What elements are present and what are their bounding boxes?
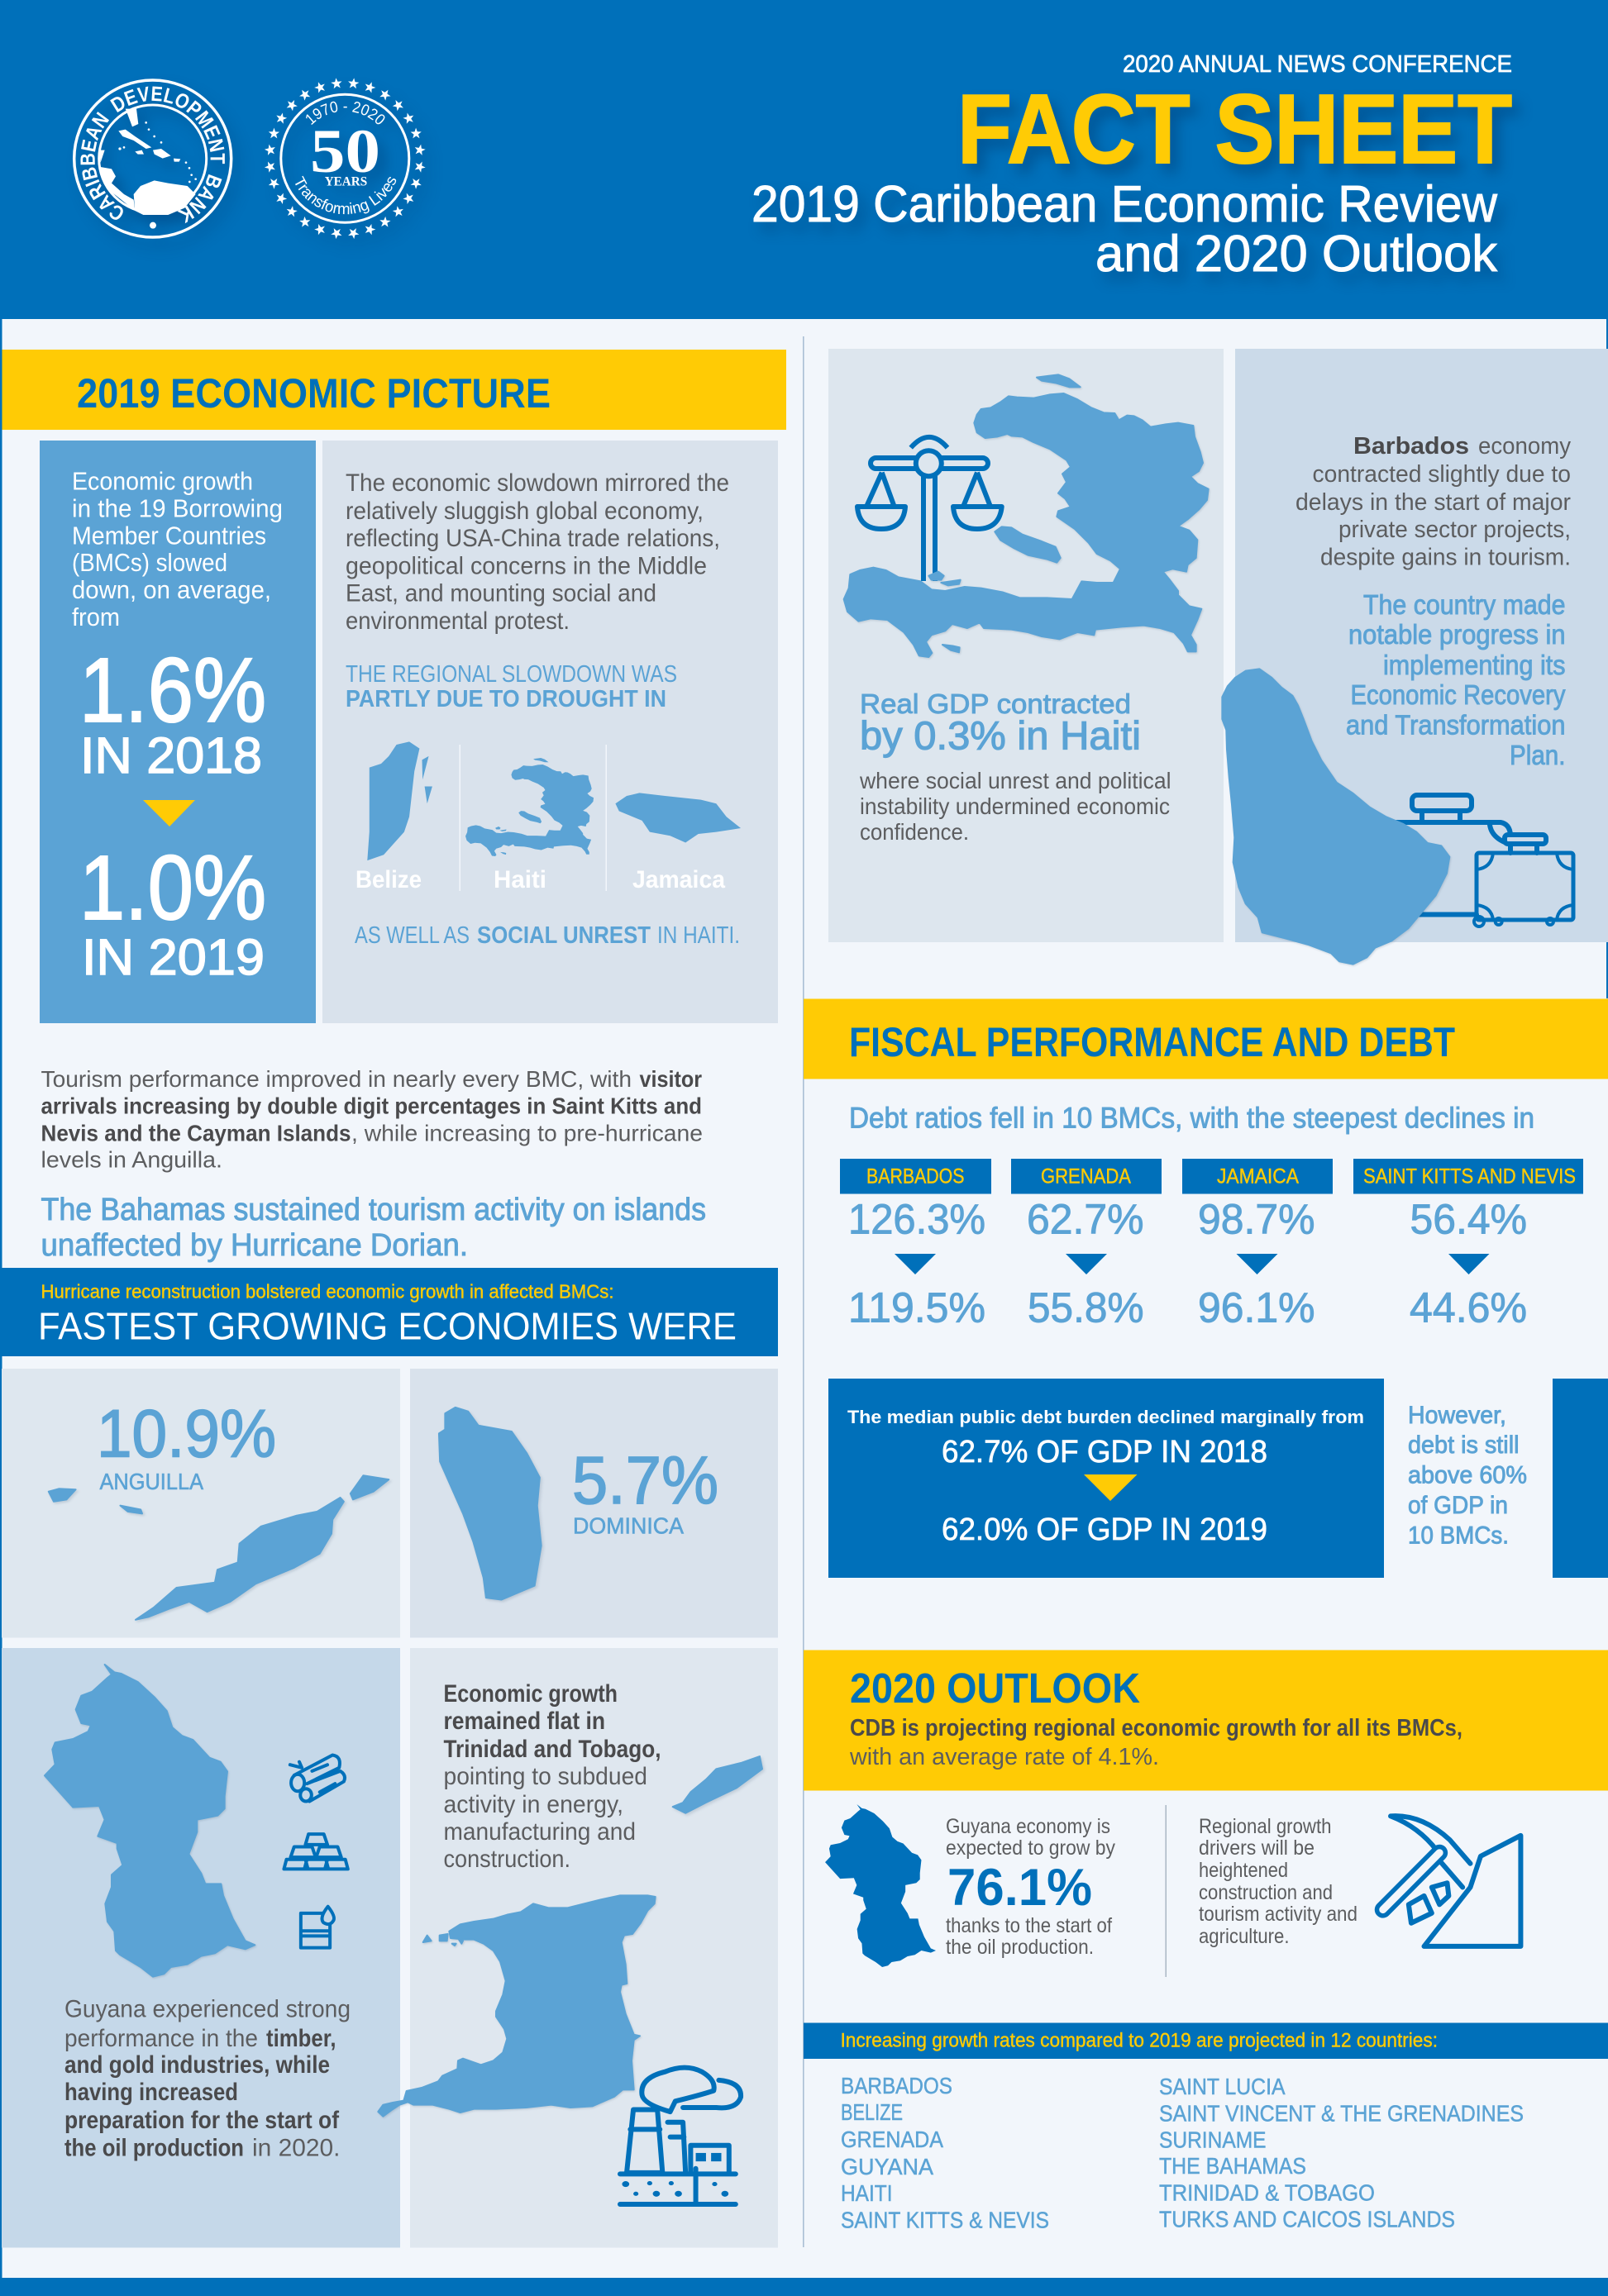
logo: Caribbean Development Bank: CARIBBEAN DEVELOPMENT BANK [80,86,230,226]
debt column: Grenada [1011,1159,1162,1331]
Guyana text: Guyana experienced strong [64,1995,351,2023]
title: fact sheet: FACT SHEET [957,74,1512,184]
subtitle: and 2020 Outlook [1095,226,1498,283]
Trinidad text: pointing to subdued [443,1763,647,1790]
header band [0,0,1608,319]
Guyana text: timber, [266,2025,336,2052]
growth intro text: Economic growth [72,466,253,496]
icon: oil barrel [301,1907,334,1948]
Trinidad text: Trinidad and Tobago, [443,1736,661,1763]
drought heading: PARTLY DUE TO DROUGHT IN [346,686,666,712]
panel: growth slowdown [40,441,316,1023]
debt column: Saint Kitts and Nevis [1353,1159,1583,1331]
tourism text [41,1066,703,1172]
Bahamas highlight: The Bahamas sustained tourism activity on islands [41,1193,706,1227]
debt callout: However, [1408,1402,1506,1429]
Guyana projection: Guyana economy is [946,1815,1110,1838]
drought heading [346,661,677,712]
map: Trinidad [378,1895,656,2117]
social unrest line: IN HAITI. [657,922,740,949]
heading: fiscal performance and debt: FISCAL PERFORMANCE AND DEBT [849,1019,1455,1065]
Trinidad text: activity in energy, [443,1791,623,1818]
Guyana text: the oil production [64,2134,244,2162]
stat: 5.7%: 5.7% [572,1443,718,1518]
Barbados highlight: and Transformation [1346,709,1566,741]
growth intro text: down, on average, [72,575,271,604]
slowdown text: reflecting USA-China trade relations, [346,525,720,552]
Barbados text: despite gains in tourism. [1320,544,1571,570]
growth drivers text: heightened [1199,1859,1288,1882]
Barbados highlight: The country made [1363,589,1566,620]
map: Haiti small [465,758,594,856]
Haiti text: instability undermined economic [860,793,1170,819]
panel: regional slowdown [322,441,778,1023]
debt callout: debt is still [1408,1431,1520,1459]
slowdown text: The economic slowdown mirrored the [346,469,729,497]
debt intro: Debt ratios fell in 10 BMCs, with the steepest declines in [849,1103,1534,1134]
map: Belize [367,741,432,860]
growth drivers text: construction and [1199,1881,1333,1904]
banner: fastest growing economies: FASTEST GROWING ECONOMIES WERE [38,1304,737,1347]
slowdown text: geopolitical concerns in the Middle [346,552,707,580]
map: Dominica [439,1408,542,1600]
panel: median debt: 62.0% OF GDP IN 2019 [942,1512,1267,1547]
growth drivers text: agriculture. [1199,1925,1290,1948]
Guyana text: in 2020. [252,2134,341,2162]
heading: 2019 economic picture [2,350,786,430]
country list: right column: SAINT LUCIA [1159,2074,1286,2099]
panel: Guyana [2,1648,400,2248]
slowdown text: environmental protest. [346,607,570,635]
panel: Trinidad and Tobago [378,1648,778,2248]
Haiti heading: Real GDP contracted [860,688,1131,719]
Barbados highlight: implementing its [1383,650,1566,680]
stat: 1.0% in 2019: 1.0% [79,837,266,939]
Haiti heading [860,688,1141,759]
arrow: down [143,800,195,826]
country list: right column [1159,2074,1524,2232]
Guyana text: and gold industries, while [64,2051,330,2079]
icon: suitcases [1396,795,1573,926]
stat: 1.0% in 2019: IN 2019 [82,929,265,985]
country list: right column: SURINAME [1159,2127,1267,2152]
heading: fiscal performance and debt [804,998,1608,1079]
map: Tobago [673,1756,762,1813]
map: Barbados [1222,669,1449,965]
heading: 2020 outlook: 2020 OUTLOOK [850,1665,1140,1712]
debt column: Jamaica: JAMAICA [1217,1165,1299,1188]
map labels: Jamaica [632,866,725,893]
stat: 1.6% in 2018: 1.6% [79,640,266,741]
debt column: Jamaica: 96.1% [1198,1284,1315,1331]
Barbados highlight: notable progress in [1348,619,1566,650]
subtitle: 2019 Caribbean Economic Review [752,176,1497,233]
debt column: Saint Kitts and Nevis: 44.6% [1410,1284,1527,1331]
growth intro text: Member Countries [72,521,266,550]
debt callout: above 60% [1408,1461,1527,1489]
Haiti text: where social unrest and political [859,768,1171,793]
banner: increasing growth rates [804,2023,1608,2059]
tourism text: Nevis and the Cayman Islands [41,1121,351,1146]
Trinidad text: manufacturing and [443,1818,636,1846]
Barbados text [1295,433,1571,570]
map: Jamaica [615,793,741,843]
Guyana projection [946,1815,1115,1959]
slowdown text [346,469,729,635]
debt column: Barbados [840,1159,991,1331]
Barbados text: contracted slightly due to [1313,461,1571,488]
Barbados text: delays in the start of major [1295,489,1571,516]
icon: pickaxe and mountain [1383,1816,1520,1946]
debt callout [1408,1402,1527,1549]
icon: timber [290,1755,345,1801]
tourism text: visitor [640,1066,702,1092]
debt column: Barbados: BARBADOS [866,1165,964,1188]
banner: increasing growth rates: Increasing growth rates compared to 2019 are projected in 12 countries: [840,2030,1438,2051]
Guyana text: preparation for the start of [64,2107,339,2134]
icon: scales of justice [857,437,1002,581]
Barbados highlight: Plan. [1510,740,1566,770]
panel: Anguilla [2,1369,400,1638]
Trinidad text: remained flat in [443,1708,605,1735]
icon: factory [620,2068,741,2204]
panel: Dominica [410,1369,778,1638]
drought heading: THE REGIONAL SLOWDOWN WAS [346,661,677,688]
Barbados text: Barbados [1353,433,1469,460]
logo: 50 years: 1970 - 2020 [306,101,385,125]
growth intro text: (BMCs) slowed [72,548,227,577]
Bahamas highlight: unaffected by Hurricane Dorian. [41,1228,468,1263]
Barbados highlight: Economic Recovery [1351,679,1566,710]
Guyana text [64,1995,351,2162]
country list: right column: THE BAHAMAS [1159,2153,1306,2179]
country list: left column: BELIZE [841,2099,903,2125]
tourism text: arrivals increasing by double digit percentages in Saint Kitts and [41,1093,702,1119]
debt callout: of GDP in [1408,1492,1508,1519]
debt column: Grenada: 62.7% [1027,1195,1144,1243]
panel: median debt [828,1379,1384,1578]
country list: left column: SAINT KITTS & NEVIS [841,2207,1049,2233]
stat: 1.6% in 2018 [79,640,266,784]
tourism text: Tourism performance improved in nearly every BMC, with [41,1066,632,1092]
growth intro text: from [72,603,120,631]
country list: left column: HAITI [841,2180,893,2206]
growth intro text: in the 19 Borrowing [72,494,283,522]
panel: Haiti GDP [828,349,1224,942]
Guyana projection: thanks to the start of [946,1914,1112,1937]
Haiti text: confidence. [860,819,969,845]
heading: 2020 outlook: with an average rate of 4.1%. [849,1744,1159,1770]
social unrest line: AS WELL AS [355,922,470,949]
map labels: Haiti [494,866,546,893]
heading: 2020 outlook: CDB is projecting regional economic growth for all its BMCs, [850,1715,1462,1741]
map: Guyana [45,1665,255,1977]
Bahamas highlight [41,1193,706,1263]
growth drivers text: drivers will be [1199,1836,1315,1860]
Guyana projection: expected to grow by [946,1836,1115,1860]
slowdown text: relatively sluggish global economy, [346,498,704,525]
tourism text: , while increasing to pre-hurricane [351,1121,703,1146]
country list: right column: TURKS AND CAICOS ISLANDS [1159,2207,1455,2232]
debt column: Grenada: GRENADA [1041,1165,1131,1188]
stat: 1.0% in 2019 [79,837,266,985]
map: Anguilla [49,1475,389,1620]
icon: gold bars [284,1834,348,1869]
social unrest line: SOCIAL UNREST [477,922,651,949]
stat: 10.9%: 10.9% [97,1397,276,1471]
Trinidad text: Economic growth [443,1680,618,1708]
debt column: Jamaica [1182,1159,1333,1331]
heading: 2019 economic picture: 2019 ECONOMIC PICTURE [77,370,551,417]
footer band [0,2278,1608,2296]
heading: 2020 outlook [804,1650,1608,1790]
tourism text: levels in Anguilla. [41,1147,222,1172]
Barbados highlight [1346,589,1566,770]
country list: left column: GUYANA [841,2154,933,2179]
logo: 50 years: 50 [310,117,380,186]
map labels [355,866,725,893]
logo: 50 years: Transforming Lives [295,175,397,215]
panel: Barbados [1222,349,1608,965]
debt column: Saint Kitts and Nevis: 56.4% [1410,1195,1527,1243]
panel: median debt: The median public debt burden declined marginally from [847,1407,1364,1427]
stat: 1.6% in 2018: IN 2018 [80,727,262,784]
social unrest line [355,922,740,949]
label: Anguilla: ANGUILLA [99,1469,203,1494]
Guyana text: performance in the [64,2025,258,2052]
Guyana projection: 76.1% [947,1859,1092,1917]
Haiti text [859,768,1171,845]
map: Haiti large [844,374,1209,657]
banner: fastest growing economies [0,1268,778,1356]
Guyana text: having increased [64,2079,238,2106]
logo: 50 years: YEARS [325,175,367,188]
country list: left column [841,2073,1049,2233]
slowdown text: East, and mounting social and [346,580,656,607]
subtitle [752,176,1498,283]
country list: left column: BARBADOS [841,2073,952,2098]
country list: right column: TRINIDAD & TOBAGO [1159,2180,1375,2205]
growth intro text [72,466,283,631]
debt column: Grenada: 55.8% [1028,1284,1144,1331]
Barbados text: private sector projects, [1338,517,1571,543]
debt column: Jamaica: 98.7% [1198,1195,1315,1243]
debt callout: 10 BMCs. [1408,1522,1509,1549]
growth drivers text [1199,1815,1357,1948]
map labels: Belize [355,866,422,893]
country list: right column: SAINT VINCENT & THE GRENADINES [1159,2101,1524,2126]
debt column: Barbados: 126.3% [848,1195,985,1243]
logo: 50 years [265,78,426,239]
debt column: Barbados: 119.5% [848,1284,985,1331]
Guyana projection: the oil production. [946,1936,1094,1959]
growth drivers text: Regional growth [1199,1815,1331,1838]
banner: fastest growing economies: Hurricane reconstruction bolstered economic growth in affected BMCs: [41,1281,613,1303]
panel: median debt: 62.7% OF GDP IN 2018 [942,1435,1267,1470]
country list: left column: GRENADA [841,2127,943,2152]
growth drivers text: tourism activity and [1199,1903,1357,1926]
conference label: 2020 ANNUAL NEWS CONFERENCE [1123,51,1512,78]
Haiti heading: by 0.3% in Haiti [860,714,1141,759]
map: Guyana outlook [825,1804,936,1967]
Trinidad text [443,1680,661,1873]
label: Dominica: DOMINICA [573,1512,684,1539]
Barbados text: economy [1478,433,1571,460]
Trinidad text: construction. [443,1846,570,1873]
debt column: Saint Kitts and Nevis: SAINT KITTS AND NEVIS [1363,1165,1576,1188]
